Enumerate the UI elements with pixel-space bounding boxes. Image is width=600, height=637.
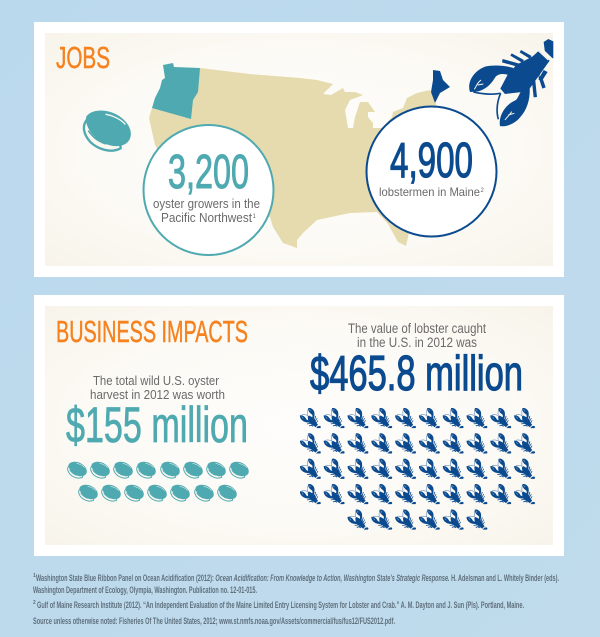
heading: jobs: JOBS bbox=[56, 40, 110, 75]
map: contiguous United States bbox=[149, 68, 440, 248]
footnotes: 2 bbox=[33, 600, 36, 606]
text: lobster value bbox=[348, 321, 486, 350]
footnotes: Washington Department of Ecology, Olympia, Washington. Publication no. 12-01-015. bbox=[33, 585, 257, 595]
callout: oyster growers: Pacific Northwest bbox=[161, 211, 252, 225]
callout: lobstermen bbox=[366, 106, 496, 236]
pictogram: lobsters bbox=[300, 408, 535, 530]
callout: lobstermen: 2 bbox=[480, 188, 484, 194]
callout: oyster growers: oyster growers in the bbox=[153, 197, 260, 211]
callout: oyster growers: 3,200 bbox=[168, 146, 249, 199]
callout: oyster growers bbox=[144, 125, 274, 255]
figure: 155 million: $155 million bbox=[66, 397, 248, 453]
footnotes: Source unless otherwise noted: Fisheries Of The United States, 2012; www.st.nmfs.noaa.gov/Assets/commercial/fus/fus12/FUS2012.pdf. bbox=[33, 616, 395, 626]
pictogram: oysters bbox=[68, 462, 249, 501]
callout: lobstermen: 4,900 bbox=[390, 134, 473, 188]
text: lobster value: in the U.S. in 2012 was bbox=[357, 335, 477, 350]
map: Maine bbox=[431, 70, 450, 103]
text: oyster harvest: The total wild U.S. oyster bbox=[93, 373, 220, 388]
callout: lobstermen: lobstermen in Maine bbox=[379, 185, 480, 199]
map: Washington and Oregon bbox=[152, 63, 200, 119]
footnotes: 1 bbox=[33, 573, 36, 579]
text: oyster harvest: harvest in 2012 was worth bbox=[90, 387, 225, 402]
icon: oyster bbox=[84, 110, 131, 151]
heading: business impacts: BUSINESS IMPACTS bbox=[56, 314, 248, 349]
panel: business impacts bbox=[34, 295, 564, 556]
icon: lobster bbox=[469, 39, 553, 126]
text: oyster harvest bbox=[90, 373, 225, 402]
callout: oyster growers: 1 bbox=[252, 214, 256, 220]
footnotes bbox=[33, 573, 559, 626]
text: lobster value: The value of lobster caught bbox=[348, 321, 486, 336]
panel: jobs bbox=[34, 22, 564, 277]
